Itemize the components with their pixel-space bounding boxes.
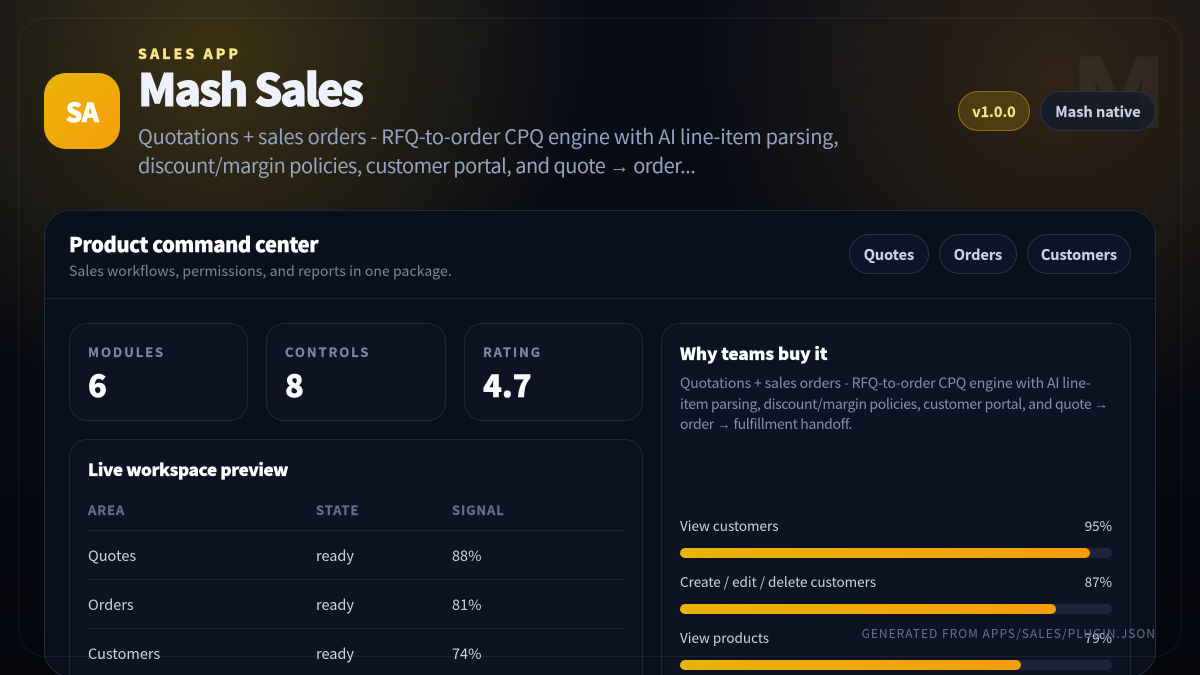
- stat: controls: [266, 323, 446, 421]
- panel heading: Product command center: [69, 229, 318, 258]
- chip: quotes: [849, 234, 929, 274]
- bar: view customers: 95%: [1085, 515, 1112, 535]
- description: [138, 121, 838, 179]
- icon: app badge: [44, 73, 120, 149]
- table: ready: [316, 594, 354, 615]
- stat: modules: [69, 323, 248, 421]
- table: ready: [316, 545, 354, 566]
- header divider: [45, 298, 1155, 299]
- chip: orders: [939, 234, 1017, 274]
- stat: controls: CONTROLS: [285, 342, 370, 361]
- preview heading: Live workspace preview: [88, 456, 288, 481]
- bar: create edit delete customers: 87%: [1085, 571, 1112, 591]
- bar: create edit delete customers: [680, 571, 1112, 614]
- description: Quotations + sales orders - RFQ-to-order CPQ engine with AI line-item parsing,: [138, 121, 838, 150]
- stat: rating: [464, 323, 643, 421]
- bar: view customers: View customers: [680, 515, 779, 535]
- table: Customers: [88, 643, 160, 664]
- panel: why teams buy it: [661, 323, 1131, 675]
- bar: create edit delete customers: Create / edit / delete customers: [680, 571, 876, 591]
- stat: modules: MODULES: [88, 342, 165, 361]
- panel subtitle: Sales workflows, permissions, and reports in one package.: [69, 261, 452, 281]
- table: 74%: [452, 643, 481, 664]
- why body text: order → fulfillment handoff.: [680, 414, 852, 434]
- bar: view products: 79%: [1085, 627, 1112, 647]
- chip: customers: [1027, 234, 1131, 274]
- why body text: item parsing, discount/margin policies, customer portal, and quote →: [680, 394, 1108, 414]
- chip: quotes: Quotes: [864, 244, 914, 264]
- icon: app badge: SA: [66, 92, 98, 130]
- stat: modules: 6: [88, 361, 107, 406]
- table: [88, 500, 624, 664]
- why heading: Why teams buy it: [680, 340, 827, 365]
- stat: controls: 8: [285, 361, 304, 406]
- version chip: [958, 91, 1030, 131]
- why body text: [680, 373, 1108, 434]
- table: ready: [316, 643, 354, 664]
- bar: view customers: [680, 515, 1112, 558]
- table: STATE: [316, 500, 359, 519]
- footer source note: GENERATED FROM APPS/SALES/PLUGIN.JSON: [862, 625, 1156, 642]
- table: 88%: [452, 545, 481, 566]
- stat: rating: 4.7: [483, 361, 532, 406]
- chip: mash native: [1040, 91, 1156, 131]
- table: AREA: [88, 500, 125, 519]
- panel: live workspace preview: [69, 439, 643, 675]
- version chip: v1.0.0: [972, 100, 1016, 122]
- description: discount/margin policies, customer portal, and quote → order...: [138, 150, 695, 179]
- chip: orders: Orders: [954, 244, 1002, 264]
- table: SIGNAL: [452, 500, 505, 519]
- why body text: Quotations + sales orders - RFQ-to-order CPQ engine with AI line-: [680, 373, 1091, 393]
- panel: product command center: [44, 210, 1156, 675]
- bar: view products: [680, 627, 1112, 670]
- chip: customers: Customers: [1041, 244, 1117, 264]
- stat: rating: RATING: [483, 342, 542, 361]
- watermark letter: M: [1070, 17, 1168, 156]
- title: Mash Sales: [138, 55, 362, 119]
- bar: view products: View products: [680, 627, 769, 647]
- table: Quotes: [88, 545, 136, 566]
- eyebrow: SALES APP: [138, 44, 241, 64]
- table: Orders: [88, 594, 134, 615]
- table: 81%: [452, 594, 481, 615]
- chip: mash native: Mash native: [1055, 100, 1141, 122]
